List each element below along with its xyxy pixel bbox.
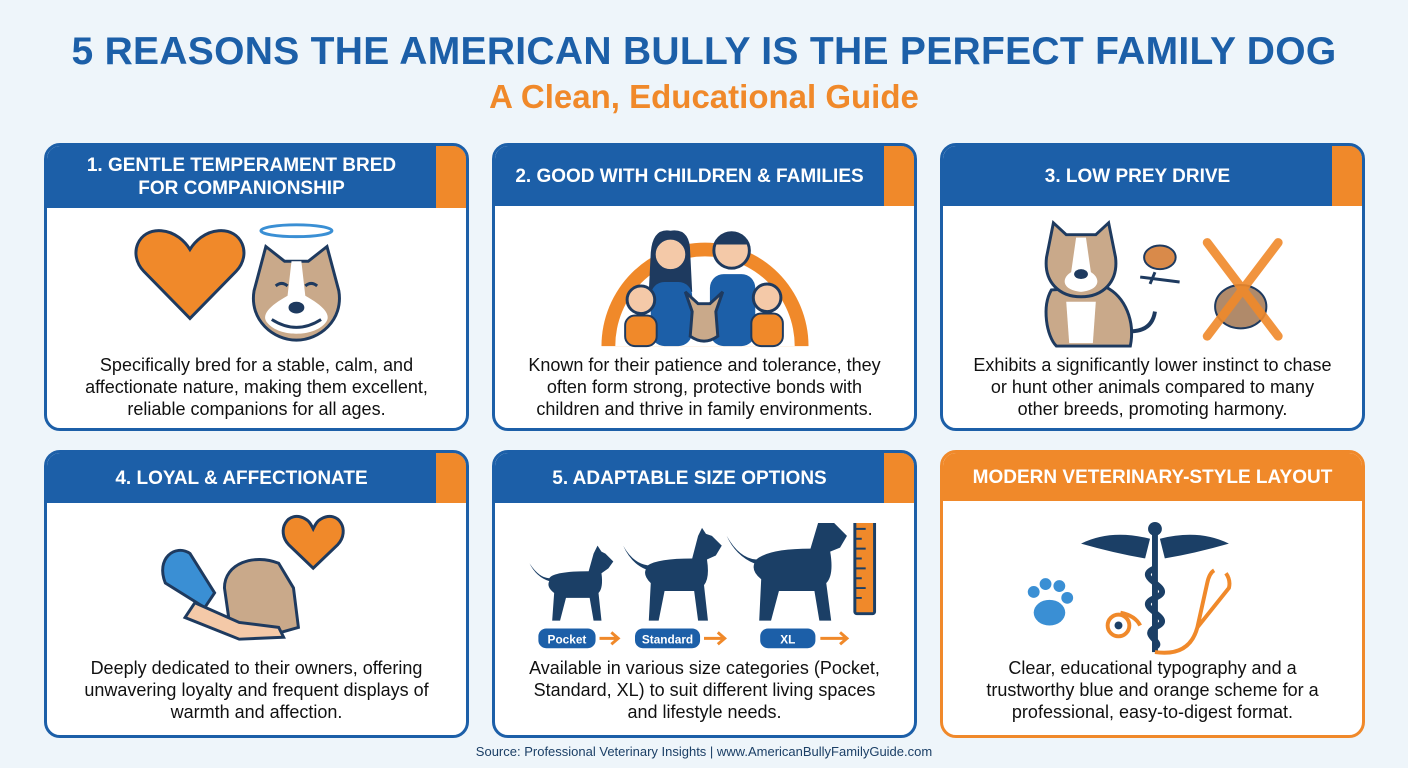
header 5 xyxy=(495,453,914,503)
text 5: Available in various size categories (Pocket, Standard, XL) to suit different living spaces and lifestyle needs. xyxy=(529,658,880,722)
icon: three dog silhouettes with labels and ruler: Pocket xyxy=(548,632,586,646)
header 6: MODERN VETERINARY-STYLE LAYOUT xyxy=(973,466,1332,488)
text 4: Deeply dedicated to their owners, offering unwavering loyalty and frequent displays of warmth and affection. xyxy=(84,658,429,722)
icon: family xyxy=(602,230,808,348)
panel: low prey drive xyxy=(940,143,1365,431)
header 2: 2. GOOD WITH CHILDREN & FAMILIES xyxy=(515,166,864,186)
header 1: FOR COMPANIONSHIP xyxy=(138,178,345,199)
header 1: 1. GENTLE TEMPERAMENT BRED xyxy=(87,155,396,176)
header 2 xyxy=(495,146,914,206)
panel: gentle temperament xyxy=(44,143,469,431)
icon: dog, bird, crossed squirrel xyxy=(1044,220,1283,348)
header 3: 3. LOW PREY DRIVE xyxy=(1045,166,1230,186)
header 6 xyxy=(943,453,1362,501)
icon: heart and dog face xyxy=(134,223,341,342)
header 4: 4. LOYAL & AFFECTIONATE xyxy=(115,468,368,488)
text 1: Specifically bred for a stable, calm, and affectionate nature, making them excellent, reliable companions for all ages. xyxy=(85,355,428,419)
panel: modern veterinary layout xyxy=(940,450,1365,738)
header 1 xyxy=(47,146,466,208)
panel: size options xyxy=(492,450,917,738)
subtitle: A Clean, Educational Guide xyxy=(489,78,919,115)
header 4 xyxy=(47,453,466,503)
text 6: Clear, educational typography and a trustworthy blue and orange scheme for a professional, easy-to-digest format. xyxy=(986,658,1319,722)
icon: glove petting puppy with heart xyxy=(161,514,345,641)
icon: three dog silhouettes with labels and ruler: XL xyxy=(780,632,795,646)
text 3: Exhibits a significantly lower instinct to chase or hunt other animals compared to many other breeds, promoting harmony. xyxy=(973,355,1332,419)
header 5: 5. ADAPTABLE SIZE OPTIONS xyxy=(552,468,827,488)
footer source: Source: Professional Veterinary Insights | www.AmericanBullyFamilyGuide.com xyxy=(476,744,932,759)
header 3 xyxy=(943,146,1362,206)
panel: loyal xyxy=(44,450,469,738)
panel: good with children xyxy=(492,143,917,431)
title: 5 REASONS THE AMERICAN BULLY IS THE PERFECT FAMILY DOG xyxy=(71,30,1337,73)
icon: three dog silhouettes with labels and ruler: Standard xyxy=(642,632,693,646)
icon: caduceus paw stethoscope xyxy=(1028,522,1232,655)
icon: three dog silhouettes with labels and ruler xyxy=(530,523,876,648)
text 2: Known for their patience and tolerance, they often form strong, protective bonds with children and thrive in family environments. xyxy=(528,355,881,419)
